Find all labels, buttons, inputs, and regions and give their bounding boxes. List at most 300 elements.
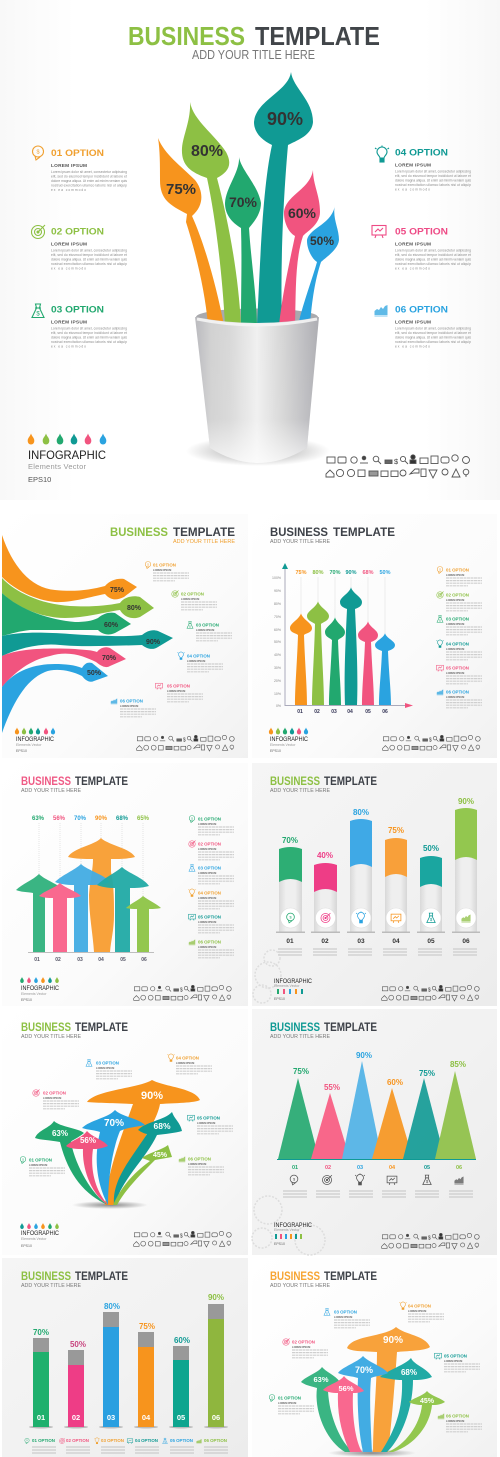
option 04: 04 OPTION (198, 890, 221, 896)
option 05: 05 OPTION (446, 666, 469, 670)
cylinder 03: 03 (357, 938, 365, 945)
cylinder 05 (417, 844, 445, 955)
option 06 (111, 698, 156, 717)
option 01: LOREM IPSUM (153, 568, 171, 572)
title: ADD YOUR TITLE HERE (270, 539, 330, 545)
option 04 (178, 651, 223, 672)
option 05: dolore magna aliqua. Ut enim ad minim veniam quis (395, 258, 471, 262)
cylinder 01: 70% (282, 836, 298, 845)
option 02 (189, 840, 234, 860)
option 02: LOREM IPSUM (51, 242, 87, 248)
icon rows (382, 1233, 479, 1249)
mushroom: orange 90%: 90% (141, 1090, 163, 1102)
option 01 (32, 146, 127, 192)
category labels: 03 (77, 957, 83, 963)
option 04: elit, sed do eiusmod tempor incididunt ut labore et (395, 174, 471, 178)
option 05: LOREM IPSUM (446, 671, 464, 675)
option 06: LOREM IPSUM (198, 945, 216, 949)
option 04: LOREM IPSUM (198, 896, 216, 900)
cylinder 01: 01 (286, 938, 294, 945)
title: BUSINESS (270, 1022, 320, 1034)
option 01: 01 OPTION (29, 1158, 52, 1162)
option 02: LOREM IPSUM (181, 597, 199, 601)
option 02: nostrud exercitation ullamco laboris nisi ut aliquip (51, 262, 127, 266)
flow: blue (2, 663, 108, 733)
axis tick labels: 0% (276, 704, 281, 708)
option 01 (145, 562, 189, 581)
mushroom: pink 56% (323, 1376, 364, 1452)
option 04: 04 OPTION (408, 1304, 431, 1308)
option 06 (438, 1414, 482, 1432)
flow labels: 80% (127, 605, 142, 612)
percent labels (32, 816, 150, 822)
option 04 (375, 146, 471, 192)
title: ADD YOUR TITLE HERE (270, 1034, 330, 1040)
option 03: 03 OPTION (334, 1310, 357, 1314)
legend: EPS10 (16, 749, 27, 753)
column 80%: 80% (312, 570, 324, 576)
option 05: 05 OPTION (167, 684, 190, 688)
panel: main pot infographic (0, 0, 500, 500)
category icons (290, 1173, 464, 1185)
triangle labels: 60% (387, 1078, 403, 1087)
axis tick labels: 40% (274, 653, 281, 657)
title (270, 1271, 377, 1289)
option 06 (189, 940, 234, 958)
flow: emerald (2, 593, 131, 636)
option 02: LOREM IPSUM (198, 847, 216, 851)
option 02: elit, sed do eiusmod tempor incididunt ut labore et (51, 253, 127, 257)
option 01 (269, 1394, 314, 1414)
title (21, 1271, 128, 1289)
category labels: 06 (456, 1165, 462, 1171)
option 03: LOREM IPSUM (198, 871, 216, 875)
title: BUSINESS (21, 776, 71, 788)
option 05: ex ea commodo (395, 266, 430, 270)
axis tick labels: 30% (274, 666, 281, 670)
option 03 (32, 304, 127, 348)
mushroom: orange 90% (347, 1327, 430, 1452)
icon rows (326, 455, 470, 478)
title: ADD YOUR TITLE HERE (270, 788, 330, 794)
title: TEMPLATE (324, 1271, 377, 1283)
bar options: 05 OPTION (170, 1438, 193, 1443)
option 06: 06 OPTION (188, 1156, 211, 1162)
panel: triangles (252, 1009, 497, 1255)
option 01: LOREM IPSUM (446, 573, 464, 577)
option 01: 01 OPTION (446, 568, 469, 572)
mushroom: teal 68%: 68% (401, 1368, 417, 1377)
legend: droplets and label: INFOGRAPHIC (28, 448, 106, 462)
mushroom: pink (39, 883, 81, 952)
panel: cylinders (252, 763, 497, 1006)
panel: mushroom columns (2, 763, 248, 1006)
option 05: LOREM IPSUM (395, 242, 431, 248)
cylinder 01 (276, 836, 305, 955)
icon rows (382, 985, 479, 1001)
title: TEMPLATE (324, 1022, 377, 1034)
cylinder 04 (382, 826, 410, 955)
cup (195, 317, 319, 463)
mushroom: blue (55, 864, 110, 952)
mushroom: emerald (16, 874, 64, 952)
column 75% (290, 570, 312, 715)
mushroom: teal 68%: 68% (153, 1121, 171, 1131)
title: BUSINESS (270, 527, 328, 539)
legend: INFOGRAPHIC (21, 1231, 60, 1237)
title: BUSINESS (110, 527, 168, 539)
triangle labels: 55% (324, 1083, 340, 1092)
axis tick labels: 20% (274, 679, 281, 683)
category labels: 02 (325, 1165, 331, 1171)
percent labels: 63% (32, 816, 45, 822)
axis tick labels: 10% (274, 692, 281, 696)
option 05: LOREM IPSUM (444, 1359, 462, 1363)
bar 04: 04 (142, 1413, 151, 1422)
option 04: LOREM IPSUM (408, 1309, 426, 1313)
title: BUSINESS (21, 1271, 71, 1283)
option text blocks (32, 1447, 228, 1453)
mushroom: teal (97, 867, 149, 952)
plant: emerald 70% (225, 157, 261, 325)
title: ADD YOUR TITLE HERE (21, 1283, 81, 1289)
percent labels: 70% (74, 816, 87, 822)
option 03: 03 OPTION (198, 866, 221, 870)
option 01: Lorem ipsum dolor sit amet, consectetur adipiscing (51, 170, 127, 174)
option 02: LOREM IPSUM (446, 598, 464, 602)
percent labels: 65% (137, 816, 150, 822)
bar 03 (99, 1302, 123, 1428)
flow: green (2, 578, 154, 618)
mushroom: orange 90% (87, 1080, 200, 1205)
text blocks (283, 1191, 473, 1197)
option 06: 06 OPTION (446, 690, 469, 694)
category labels: 04 (389, 1165, 396, 1171)
option 02 (172, 590, 217, 610)
option 03: elit, sed do eiusmod tempor incididunt ut labore et (51, 331, 127, 335)
cylinder 06: 90% (458, 797, 474, 806)
option 02: LOREM IPSUM (43, 1096, 61, 1100)
icon rows (134, 985, 231, 1001)
flow labels: 70% (102, 655, 117, 662)
cylinder 06 (452, 797, 480, 955)
column 70% (325, 570, 345, 715)
title: BUSINESS (270, 1271, 320, 1283)
option 06: elit, sed do eiusmod tempor incididunt ut labore et (395, 331, 471, 335)
option 02: 02 OPTION (181, 592, 204, 596)
option 06: Lorem ipsum dolor sit amet, consectetur adipiscing (395, 326, 471, 330)
option 01: LOREM IPSUM (51, 163, 87, 169)
mushroom: pink 56%: 56% (338, 1384, 354, 1393)
legend: EPS10 (274, 1242, 285, 1246)
option 04: LOREM IPSUM (176, 1061, 194, 1065)
bar 02 (64, 1340, 88, 1428)
bar options: 06 OPTION (204, 1438, 227, 1443)
title: BUSINESS (21, 1022, 71, 1034)
option 06: 06 OPTION (446, 1414, 469, 1418)
title (270, 527, 395, 545)
legend: Elements Vector (270, 743, 296, 747)
option 01: 01 OPTION (51, 148, 104, 159)
option 06 (179, 1156, 224, 1175)
bar 06 (204, 1293, 228, 1428)
column 50%: 50% (379, 570, 391, 576)
option 04: LOREM IPSUM (446, 647, 464, 651)
plant: teal 90% (254, 72, 313, 325)
mushroom: emerald 63% (35, 1121, 108, 1205)
axis tick labels: 90% (274, 589, 281, 593)
title: TEMPLATE (75, 1271, 128, 1283)
column 50% (375, 570, 395, 715)
cylinder 04: 04 (392, 938, 400, 945)
option 05: 05 OPTION (197, 1116, 220, 1120)
option 05: 05 OPTION (395, 226, 448, 238)
option 03: ex ea commodo (51, 344, 86, 348)
panel: bars (2, 1258, 248, 1457)
legend: EPS10 (21, 998, 32, 1002)
legend: INFOGRAPHIC (16, 737, 55, 743)
bar 04 (134, 1322, 158, 1428)
legend: EPS10 (270, 749, 281, 753)
column 75%: 01 (297, 709, 303, 715)
legend: INFOGRAPHIC (274, 979, 313, 985)
flow: teal (2, 630, 173, 656)
legend: EPS10 (274, 997, 285, 1001)
title: TEMPLATE (75, 776, 128, 788)
option 02: 02 OPTION (198, 842, 221, 846)
bar 01: 01 (37, 1413, 45, 1422)
mushroom: orange 90%: 90% (383, 1335, 403, 1346)
shadow (72, 1201, 148, 1209)
mushroom: blue 70%: 70% (355, 1365, 373, 1375)
legend: INFOGRAPHIC (21, 986, 60, 992)
category labels: 01 (34, 957, 40, 963)
option 05: nostrud exercitation ullamco laboris nisi ut aliquip (395, 262, 471, 266)
option 03 (324, 1308, 370, 1328)
bar 04: 75% (139, 1322, 155, 1331)
option 04 (436, 639, 482, 660)
chart axes (285, 566, 408, 706)
option 03 (86, 1060, 132, 1079)
option 04: dolore magna aliqua. Ut enim ad minim veniam quis (395, 178, 471, 182)
percent labels: 56% (53, 816, 66, 822)
triangle labels: 90% (356, 1051, 372, 1060)
column 80%: 02 (314, 709, 320, 715)
bar options: 03 OPTION (101, 1438, 124, 1443)
cylinder 02 (311, 851, 340, 955)
option 02: dolore magna aliqua. Ut enim ad minim veniam quis (51, 258, 127, 262)
option 06: nostrud exercitation ullamco laboris nisi ut aliquip (395, 340, 471, 344)
bar 01: 70% (33, 1328, 49, 1337)
flow labels: 50% (87, 670, 102, 677)
triangle labels: 85% (450, 1060, 466, 1069)
title: ADD YOUR TITLE HERE (21, 1034, 81, 1040)
mushroom: green (126, 896, 161, 952)
option 01: nostrud exercitation ullamco laboris nisi ut aliquip (51, 184, 127, 188)
cylinder 02: 02 (321, 938, 329, 945)
title (128, 21, 380, 51)
option 05: Lorem ipsum dolor sit amet, consectetur adipiscing (395, 248, 471, 252)
title: TEMPLATE (324, 776, 377, 788)
option 01: 01 OPTION (153, 562, 176, 568)
guide lines (39, 823, 143, 896)
axis tick labels: 70% (274, 615, 281, 619)
bar options: 01 OPTION (32, 1438, 55, 1443)
legend: Elements Vector (274, 1228, 300, 1232)
column 90%: 90% (345, 570, 357, 576)
icon rows (134, 1231, 231, 1247)
flow labels (87, 587, 161, 677)
option 02: 02 OPTION (51, 226, 104, 238)
mushroom: orange (68, 838, 135, 952)
option 06: LOREM IPSUM (395, 320, 431, 326)
option 06 (437, 690, 482, 708)
category labels: 03 (357, 1165, 363, 1171)
title: ADD YOUR TITLE HERE (270, 1283, 330, 1289)
mushroom: pink 56%: 56% (80, 1136, 96, 1145)
plant: emerald 70%: 70% (229, 194, 258, 210)
cylinder 04: 75% (388, 826, 404, 835)
shadow (328, 1449, 416, 1457)
bar options (25, 1437, 227, 1444)
mushroom: pink 56% (66, 1131, 108, 1205)
bar options: 02 OPTION (66, 1438, 89, 1443)
base line (28, 952, 154, 954)
option 02: 02 OPTION (292, 1340, 315, 1344)
mushroom: blue 70%: 70% (104, 1118, 124, 1129)
option 03 (187, 622, 232, 641)
bar 02: 02 (72, 1413, 80, 1422)
title: ADD YOUR TITLE HERE (21, 788, 81, 794)
bar 06: 06 (212, 1413, 220, 1422)
category labels: 02 (55, 957, 61, 963)
option 03: Lorem ipsum dolor sit amet, consectetur adipiscing (51, 326, 127, 330)
title: BUSINESS (270, 776, 320, 788)
legend: Elements Vector (274, 984, 300, 988)
legend: INFOGRAPHIC (270, 737, 309, 743)
category labels (34, 957, 147, 963)
cylinder 03: 80% (353, 808, 369, 817)
option 03: LOREM IPSUM (196, 628, 214, 632)
flow: orange (2, 535, 137, 602)
option 06: ex ea commodo (395, 344, 430, 348)
column 80% (307, 570, 329, 715)
legend (15, 728, 55, 753)
cup inside (196, 308, 318, 326)
title (21, 1022, 128, 1040)
option 02 (33, 1090, 79, 1109)
option 03 (189, 864, 234, 884)
option 05 (434, 1353, 480, 1372)
option 03: LOREM IPSUM (334, 1315, 352, 1319)
option 06 (374, 304, 471, 348)
option 01 (20, 1156, 65, 1176)
option 03: dolore magna aliqua. Ut enim ad minim veniam quis (51, 336, 127, 340)
option 06: 06 OPTION (198, 940, 221, 944)
legend: droplets and label (28, 434, 106, 484)
cylinder 02: 40% (317, 851, 333, 860)
legend: Elements Vector (16, 743, 42, 747)
panel: flowing leaves (2, 514, 248, 758)
option 05 (188, 914, 234, 933)
title (270, 776, 377, 794)
title: TEMPLATE (173, 527, 235, 539)
option 03 (437, 616, 482, 635)
category labels: 06 (141, 957, 147, 963)
option 01: LOREM IPSUM (29, 1163, 47, 1167)
option 01 (437, 566, 482, 586)
legend: Elements Vector (21, 1237, 47, 1241)
legend: EPS10 (21, 1244, 32, 1248)
option 03: LOREM IPSUM (96, 1066, 114, 1070)
option 05 (156, 683, 203, 702)
category labels: 05 (424, 1165, 430, 1171)
bar options: 04 OPTION (135, 1438, 158, 1443)
option 02: 02 OPTION (446, 592, 469, 598)
column 75%: 75% (295, 570, 307, 576)
triangle chart (278, 1061, 476, 1159)
option 04: 04 OPTION (395, 148, 448, 158)
cylinder 05: 05 (427, 938, 435, 945)
title: BUSINESS (128, 21, 245, 51)
mushroom: emerald 63% (301, 1367, 353, 1452)
plant: green 80% (182, 102, 241, 325)
mushroom: green 45%: 45% (153, 1152, 168, 1159)
bar 05: 05 (177, 1413, 185, 1422)
category labels: 05 (120, 957, 126, 963)
axis tick labels (272, 576, 281, 708)
triangle labels (293, 1051, 466, 1092)
option 01: 01 OPTION (198, 816, 221, 822)
panel: mushroom bouquet (2, 1009, 248, 1255)
plant: green 80%: 80% (191, 143, 223, 160)
category labels: 01 (292, 1165, 298, 1171)
option 04 (400, 1301, 444, 1322)
option 02: ex ea commodo (51, 266, 86, 270)
axis arrows (282, 563, 413, 708)
option 05: LOREM IPSUM (167, 689, 185, 693)
mushroom: teal 68% (114, 1112, 182, 1205)
option 03: nostrud exercitation ullamco laboris nisi ut aliquip (51, 340, 127, 344)
column 68% (358, 570, 378, 715)
option 04: Lorem ipsum dolor sit amet, consectetur adipiscing (395, 170, 471, 174)
title: TEMPLATE (75, 1022, 128, 1034)
column 90%: 04 (347, 709, 353, 715)
option 02 (437, 592, 482, 611)
option 03: 03 OPTION (51, 304, 104, 316)
axis tick labels: 100% (272, 576, 281, 580)
bar 03: 80% (104, 1302, 120, 1311)
option 06: LOREM IPSUM (188, 1162, 206, 1166)
flow labels: 90% (146, 639, 161, 646)
option 04: 04 OPTION (446, 642, 469, 646)
option 05 (372, 226, 471, 270)
option 04: 04 OPTION (176, 1056, 199, 1060)
bar 01 (29, 1328, 53, 1428)
legend (20, 1223, 60, 1248)
option 01 (189, 816, 234, 835)
option 04: LOREM IPSUM (395, 162, 431, 168)
option 06: LOREM IPSUM (446, 695, 464, 699)
option 05: 05 OPTION (444, 1354, 467, 1358)
column 68%: 05 (365, 709, 371, 715)
legend: Elements Vector (21, 992, 47, 996)
plant: orange 75% (158, 138, 224, 325)
option 06: LOREM IPSUM (120, 704, 138, 708)
option 01: LOREM IPSUM (198, 822, 216, 826)
option 06: dolore magna aliqua. Ut enim ad minim veniam quis (395, 336, 471, 340)
column 50%: 06 (382, 709, 388, 715)
